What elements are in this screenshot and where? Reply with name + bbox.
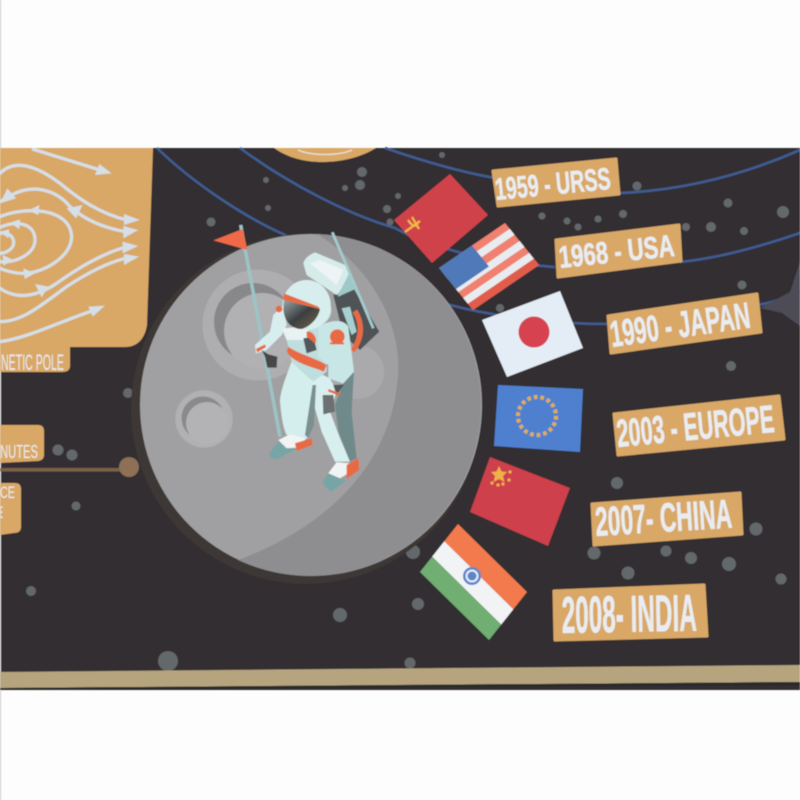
moon (131, 234, 482, 584)
nebula at right edge (760, 262, 800, 326)
label: 1959 URSS (493, 159, 619, 207)
magnetic field lines (0, 149, 127, 342)
label: 1959 URSS: 1959 - URSS (493, 161, 612, 207)
crater: large (202, 270, 314, 380)
label: minutes (0, 425, 44, 463)
panel: magnetic field (0, 148, 153, 375)
stars (26, 152, 789, 671)
bottom tan strip (0, 665, 800, 688)
label: 2007 CHINA (592, 491, 742, 545)
hammer and sickle emblem (405, 217, 420, 232)
flag: USA (439, 223, 539, 310)
backpack (303, 252, 379, 351)
antenna (332, 232, 373, 328)
helmet (283, 280, 331, 330)
boots (269, 434, 359, 492)
crater: right (330, 345, 384, 399)
flag: USSR (394, 174, 488, 263)
flag: European Union (494, 385, 583, 452)
connector line with dot (0, 457, 139, 477)
moon shaded limb (238, 234, 481, 576)
label: distance fragment (0, 483, 21, 535)
top tan planet fragment (274, 148, 376, 162)
label: distance fragment: CE (0, 483, 15, 502)
label: distance fragment: E (0, 503, 3, 522)
astronaut with flag (213, 225, 379, 492)
red pennant (213, 229, 247, 250)
legs (280, 362, 357, 462)
label: 1990 JAPAN (607, 294, 761, 355)
orbit lines (157, 148, 800, 324)
label: 2008 INDIA (554, 585, 707, 645)
panel: magnetic field: NETIC POLE (1, 350, 64, 375)
label: 1968 USA: 1968 - USA (557, 228, 676, 275)
flag: China (470, 457, 570, 546)
field line arrowheads (0, 164, 140, 317)
flag: India (420, 524, 527, 640)
crater: small (175, 390, 233, 448)
flag pole (241, 225, 280, 437)
torso and arms (255, 305, 354, 396)
label: minutes: NUTES (0, 442, 38, 462)
flag: Japan (482, 291, 583, 377)
bottom dark edge (0, 682, 800, 690)
